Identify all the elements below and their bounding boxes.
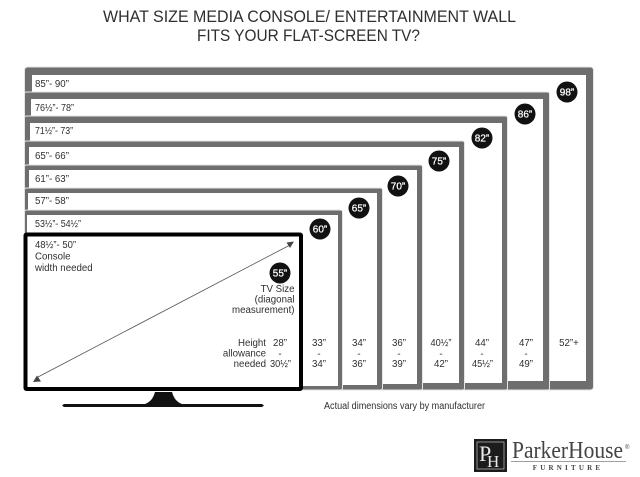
badge: 65 — [348, 198, 370, 218]
panel: 55 inch TV — [26, 234, 301, 389]
panel: 82 inch frame: - — [480, 349, 484, 360]
panel: 60 inch frame: 34” — [312, 359, 326, 370]
registered mark: ® — [625, 444, 630, 451]
badge: 65: 65” — [352, 204, 366, 214]
TV size label: (diagonal — [255, 294, 294, 306]
panel: 82 inch frame: 44” — [475, 338, 489, 349]
logo monogram: P — [479, 441, 491, 466]
height allowance label: needed — [234, 359, 266, 370]
icon: TV stand — [62, 392, 264, 407]
panel: 65 inch frame: 36” — [352, 359, 366, 370]
footnote: Actual dimensions vary by manufacturer — [324, 401, 486, 412]
height allowance label: allowance — [223, 348, 266, 360]
panel: 65 inch frame — [24, 188, 382, 390]
panel: 82 inch frame: 45½” — [472, 359, 493, 370]
panel: 75 inch frame: - — [439, 349, 443, 360]
panel: 98 inch frame: 85”- 90” — [35, 79, 69, 90]
panel: 82 inch frame — [24, 116, 508, 390]
logo: Parker House Furniture — [474, 438, 630, 472]
panel: 98 inch frame — [24, 67, 594, 390]
logo monogram: H — [487, 452, 499, 471]
panel: 86 inch frame: 76½”- 78” — [35, 103, 74, 114]
console width label: 48½”- 50” — [35, 240, 76, 251]
panel: 60 inch frame: - — [317, 349, 321, 360]
panel: 98 inch frame: 52”+ — [559, 338, 579, 349]
badge: 82: 82” — [475, 134, 489, 144]
badge: 86 — [514, 104, 536, 124]
height values: 30½” — [270, 359, 291, 370]
logo tagline: FURNITURE — [533, 464, 603, 472]
title: FITS YOUR FLAT-SCREEN TV? — [197, 27, 420, 45]
panel: 65 inch frame: 34” — [352, 338, 366, 349]
badge: 75: 75” — [432, 156, 446, 168]
title — [103, 8, 516, 45]
height allowance label: Height — [238, 338, 266, 349]
console width label: Console — [35, 252, 71, 262]
badge: 98 — [556, 82, 578, 102]
TV size label: measurement) — [232, 305, 294, 316]
badge: 70 — [388, 176, 408, 196]
panel: 86 inch frame: 47” — [519, 338, 533, 349]
panel: 75 inch frame — [24, 141, 464, 390]
logo monogram — [474, 439, 507, 472]
panel: 86 inch frame — [24, 92, 550, 390]
console width label: width needed — [34, 263, 93, 274]
height values: - — [278, 349, 282, 360]
panel: 86 inch frame: - — [524, 349, 528, 360]
badge: 60 — [310, 218, 330, 240]
panel: 65 inch frame: - — [357, 349, 361, 360]
badge: 86: 86” — [518, 110, 532, 120]
TV size label: TV Size — [261, 284, 294, 295]
console width label — [34, 240, 93, 274]
badge: 98: 98” — [560, 88, 574, 98]
panel: 60 inch frame: 33” — [312, 338, 326, 349]
panel: 70 inch frame: 61”- 63” — [35, 174, 69, 185]
panel: 70 inch frame: 36” — [392, 338, 406, 349]
badge: 75 — [428, 150, 450, 172]
panel: 75 inch frame: 65”- 66” — [35, 151, 69, 162]
badge: 55 — [270, 262, 290, 284]
panel: 86 inch frame: 49” — [519, 359, 533, 370]
diagonal arrow — [33, 242, 294, 382]
height values: 28” — [273, 338, 287, 349]
panel: 82 inch frame: 71½”- 73” — [35, 126, 73, 137]
panel: 70 inch frame — [24, 165, 422, 390]
panel: 70 inch frame: - — [397, 349, 401, 360]
badge: 82 — [472, 128, 492, 148]
panel: 60 inch frame: 53½”- 54½” — [35, 219, 81, 230]
panel: 70 inch frame: 39” — [392, 359, 406, 370]
badge: 55: 55” — [273, 268, 287, 280]
panel: 75 inch frame: 42” — [434, 359, 448, 370]
badge: 60: 60” — [313, 224, 327, 236]
title: WHAT SIZE MEDIA CONSOLE/ ENTERTAINMENT WALL — [103, 8, 516, 26]
panel: 60 inch frame — [24, 210, 342, 390]
panel: 65 inch frame: 57”- 58” — [35, 196, 69, 207]
height values — [270, 338, 291, 370]
badge: 70: 70” — [391, 182, 405, 192]
logo wordmark: ParkerHouse — [512, 438, 623, 464]
panel: 75 inch frame: 40½” — [430, 338, 452, 349]
